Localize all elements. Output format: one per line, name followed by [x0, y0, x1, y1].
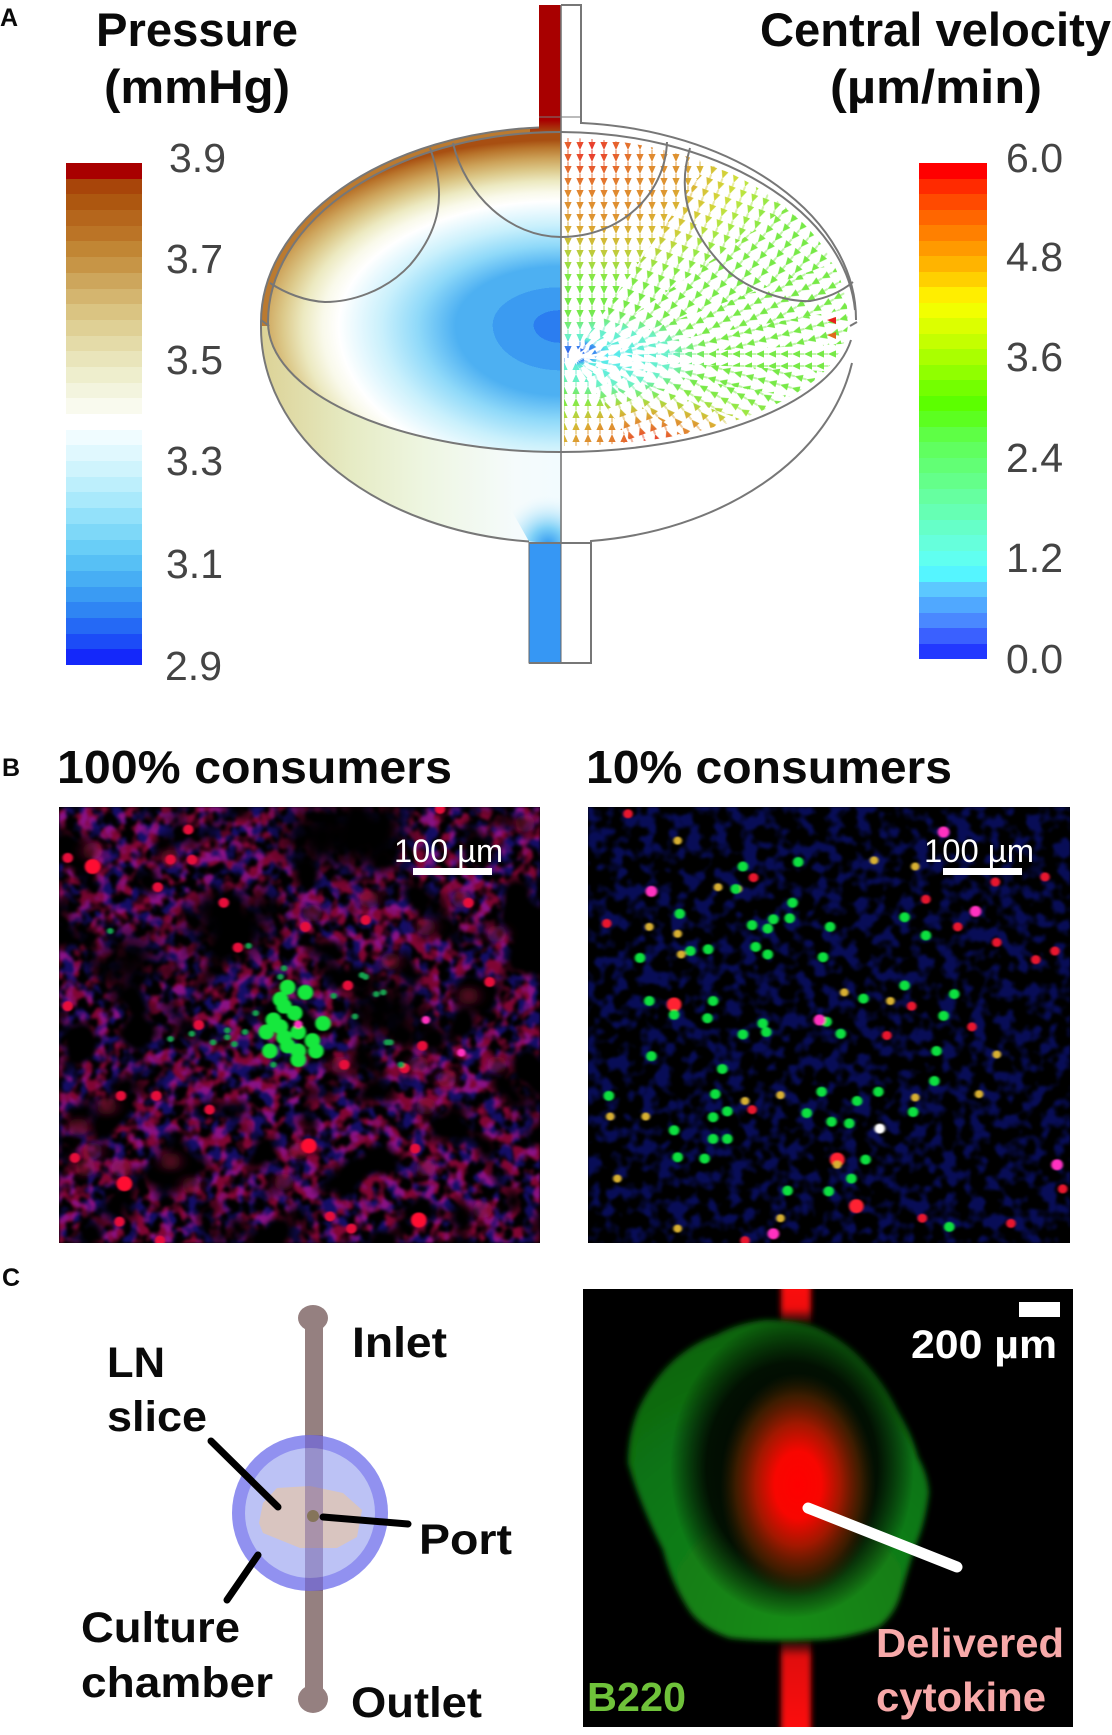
panel C: device schematic	[81, 1305, 512, 1727]
scale bar: right micrograph: 100 µm	[924, 833, 1034, 869]
pressure scale tick labels: 3.5	[166, 337, 223, 383]
heading: Central velocity	[760, 3, 1111, 113]
tube seen through chamber	[305, 1435, 323, 1591]
leader lines	[211, 1441, 408, 1600]
velocity scale tick labels: 4.8	[1006, 234, 1063, 280]
schematic labels: LN	[107, 1339, 165, 1387]
right half: velocity arrow field	[564, 138, 848, 446]
lower outlet stem	[529, 543, 561, 663]
schematic labels	[81, 1319, 512, 1727]
pressure scale tick labels: 3.3	[166, 438, 223, 484]
label Delivered cytokine: cytokine	[876, 1674, 1046, 1720]
heading: Pressure (mmHg): Pressure	[96, 3, 298, 56]
culture chamber ring	[232, 1435, 388, 1591]
velocity scale tick labels: 1.2	[1006, 535, 1063, 581]
B220 green tissue	[628, 1320, 929, 1641]
left half: pressure field	[261, 127, 561, 543]
panel label A: A	[0, 4, 18, 32]
heading: 100% consumers: 100% consumers	[57, 741, 452, 793]
scale bar: left micrograph: 100 µm	[394, 833, 503, 869]
schematic labels: Port	[419, 1516, 512, 1564]
heading: Central velocity: Central velocity	[760, 3, 1111, 56]
red haze	[78, 823, 526, 1210]
label B220: B220	[587, 1674, 686, 1720]
heading: Central velocity: (µm/min)	[830, 60, 1042, 113]
micrograph: delivered cytokine in LN slice	[583, 1280, 1073, 1735]
red cell clusters	[67, 809, 490, 1241]
pressure scale tick labels: 3.9	[169, 135, 226, 181]
chamber interior	[245, 1448, 375, 1578]
velocity scale tick labels: 0.0	[1006, 636, 1063, 682]
pointer	[808, 1508, 957, 1567]
heading: Pressure (mmHg): (mmHg)	[104, 60, 290, 113]
panel label C: C	[2, 1264, 20, 1292]
schematic labels: Culture	[81, 1604, 240, 1652]
schematic labels: Outlet	[351, 1679, 482, 1727]
velocity scale tick labels: 3.6	[1006, 334, 1063, 380]
velocity scale tick labels	[1006, 135, 1063, 682]
velocity scale tick labels: 6.0	[1006, 135, 1063, 181]
dark inner zone	[670, 1318, 914, 1618]
label Delivered cytokine: Delivered	[876, 1620, 1064, 1666]
dark gaps in tissue	[100, 803, 420, 1040]
panel label B: B	[2, 754, 20, 782]
pressure scale tick labels	[165, 135, 226, 689]
velocity colour scale	[919, 163, 987, 659]
schematic labels: Inlet	[352, 1319, 447, 1367]
delivered cytokine glow	[720, 1373, 876, 1597]
panel A: chamber simulation	[96, 0, 1111, 689]
scale bar 200 µm	[911, 1302, 1060, 1367]
pressure scale tick labels: 3.1	[166, 541, 223, 587]
pressure scale tick labels: 2.9	[165, 643, 222, 689]
heading: Pressure (mmHg)	[96, 3, 298, 113]
chamber outlines	[261, 5, 857, 663]
LN slice tissue	[259, 1486, 362, 1548]
heading: 10% consumers: 10% consumers	[586, 741, 952, 793]
upper inlet stem	[530, 5, 561, 133]
port	[307, 1510, 319, 1522]
micrograph: 10% consumers	[588, 807, 1070, 1243]
scale bar 200 µm: 200 µm	[911, 1323, 1057, 1367]
tube with inlet and outlet	[298, 1305, 328, 1713]
red channel strips	[781, 1280, 811, 1735]
rim arrows	[827, 317, 836, 339]
pressure scale tick labels: 3.7	[166, 236, 223, 282]
schematic labels: chamber	[81, 1659, 273, 1707]
pressure colour scale	[66, 163, 142, 665]
schematic labels: slice	[107, 1393, 207, 1441]
label Delivered cytokine	[876, 1620, 1064, 1720]
micrograph: 100% consumers	[59, 803, 540, 1243]
labelled cells: red, yellow, green, magenta	[606, 814, 1063, 1241]
velocity scale tick labels: 2.4	[1006, 435, 1063, 481]
